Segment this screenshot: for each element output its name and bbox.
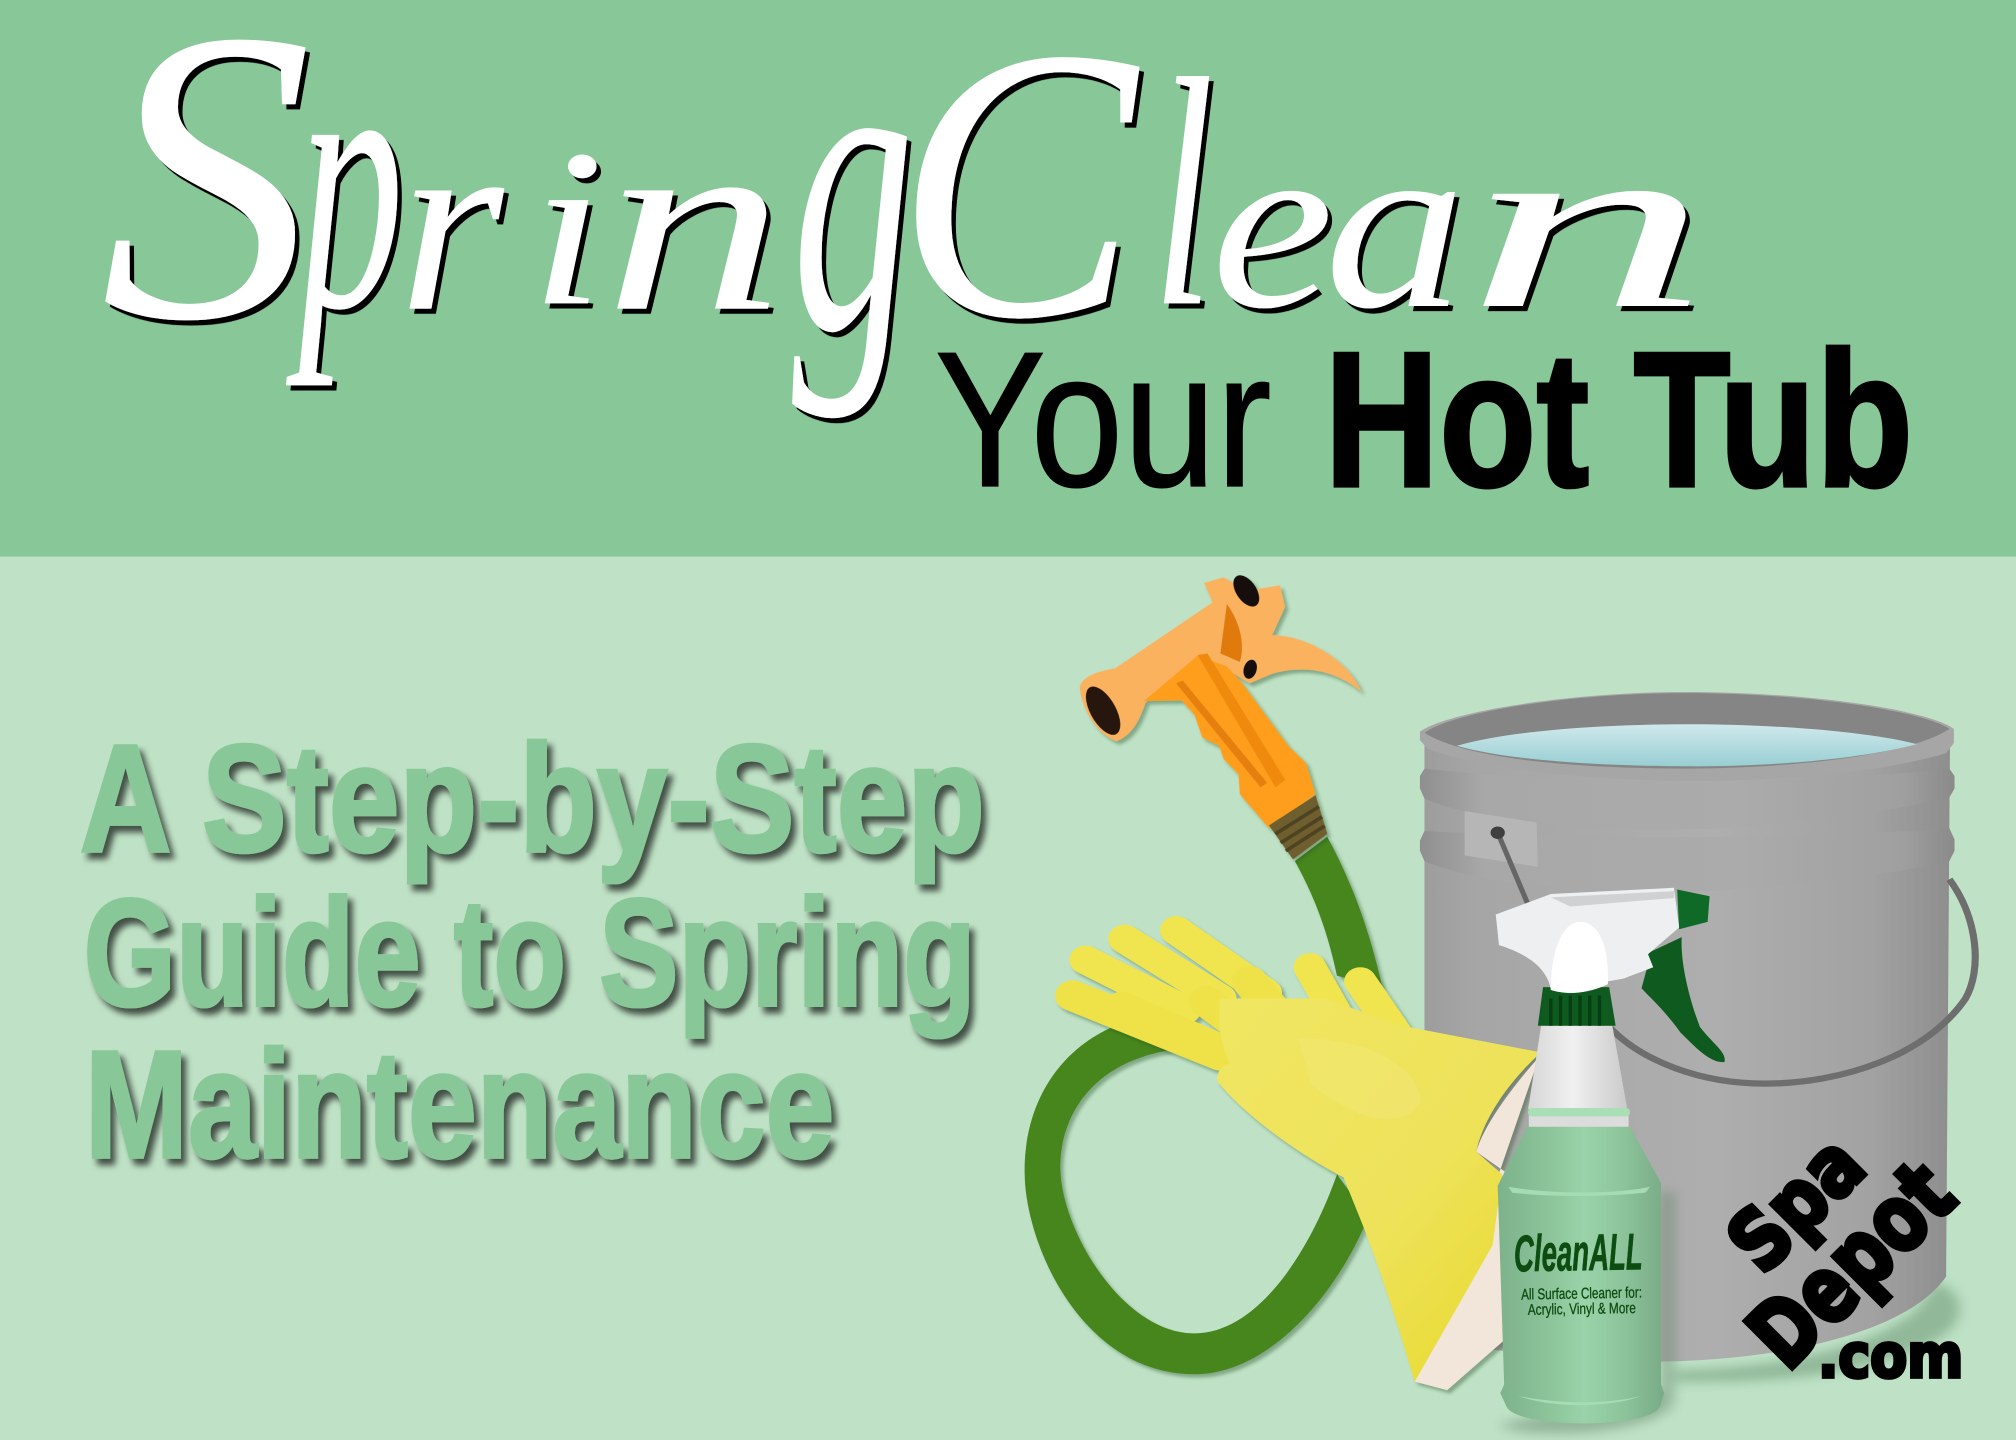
hose upper run xyxy=(1295,837,1382,987)
heading: step-by-step guide xyxy=(80,713,985,1190)
title word: Clean: l xyxy=(1152,11,1214,375)
bucket lower band xyxy=(1420,828,1955,892)
title word: Clean: n xyxy=(1466,88,1710,359)
heading line 3: Maintenance xyxy=(85,1019,834,1190)
nozzle dark fold xyxy=(1220,604,1242,662)
handle wire xyxy=(1498,833,1528,905)
title word: Spring: n xyxy=(604,79,784,364)
label: description line 2: Acrylic, Vinyl & More xyxy=(1528,1300,1636,1319)
handle tab xyxy=(1465,811,1538,867)
logo word: Spa: Spa xyxy=(1710,1117,1883,1291)
icon: spray bottle xyxy=(1496,888,1725,1433)
bucket inner wall xyxy=(1424,693,1949,769)
title word: Spring: r xyxy=(399,80,508,365)
glove lining xyxy=(1415,1057,1539,1390)
title word: Spring xyxy=(100,0,914,421)
logo word: Depot: Depot xyxy=(1727,1140,1975,1389)
spray trigger xyxy=(1642,937,1725,1062)
spray cap xyxy=(1538,987,1616,1026)
lower background xyxy=(0,557,2016,1440)
grip groove xyxy=(1198,653,1285,787)
icon: spray nozzle xyxy=(1079,572,1362,859)
bucket rim xyxy=(1420,692,1954,781)
spray head shading xyxy=(1551,891,1674,907)
icon: garden hose xyxy=(1025,837,1382,1374)
nozzle barrel and trigger xyxy=(1080,577,1362,741)
title word: Clean: e xyxy=(1211,90,1334,359)
icon: rubber gloves xyxy=(1073,930,1541,1390)
handle hole xyxy=(1491,826,1505,839)
heading line 2: Guide to Spring xyxy=(84,867,976,1038)
bucket body xyxy=(1424,737,1950,1362)
label: description line 1: All Surface Cleaner for: xyxy=(1521,1284,1642,1304)
nozzle mouth xyxy=(1079,682,1127,739)
bucket middle band xyxy=(1420,769,1955,830)
bucket ground shadow xyxy=(1674,1282,1960,1382)
label: CleanALL: CleanALL xyxy=(1513,1222,1643,1282)
bottle collar green xyxy=(1528,1108,1630,1117)
shoulder highlight xyxy=(1509,1187,1650,1196)
spray tube window xyxy=(1551,922,1608,993)
bottle body xyxy=(1498,1124,1664,1423)
heading line 1: A Step-by-Step xyxy=(80,713,985,884)
handle far side xyxy=(1609,879,1975,1084)
bottle cast shadow xyxy=(1499,1191,1674,1433)
bottle collar white xyxy=(1529,1115,1629,1127)
icon: bucket xyxy=(1420,692,1975,1382)
nozzle pin side xyxy=(1242,659,1259,680)
glove body xyxy=(1217,998,1541,1382)
spray rear collar xyxy=(1677,889,1710,929)
bottle label xyxy=(1513,1222,1644,1319)
grip groove thin xyxy=(1176,681,1267,787)
logo word: .com: .com xyxy=(1818,1322,1963,1392)
subtitle: Your Hot Tub xyxy=(935,311,1913,527)
hose loop xyxy=(1025,1028,1368,1374)
subtitle word: Your: Your xyxy=(935,311,1272,527)
glove highlight xyxy=(1298,1038,1421,1119)
base highlight xyxy=(1518,1396,1642,1405)
logo: Spa Depot .com xyxy=(1710,1117,1975,1392)
threaded hose connector xyxy=(1269,795,1327,859)
bottle neck xyxy=(1528,1026,1627,1109)
header band xyxy=(0,0,2016,557)
title word: Spring: i xyxy=(530,103,605,352)
nozzle pistol grip xyxy=(1144,656,1316,828)
water xyxy=(1457,724,1917,766)
nozzle pin top xyxy=(1228,572,1265,610)
illustration: cleaning supplies xyxy=(1025,572,1975,1433)
title word: Clean: a xyxy=(1324,90,1466,360)
title word: Clean xyxy=(896,0,1710,400)
glove back fingers xyxy=(1086,930,1395,1033)
spray head xyxy=(1496,888,1679,990)
title: Spring Clean script lettering xyxy=(100,0,1710,421)
glove front fingers xyxy=(1073,981,1301,1055)
